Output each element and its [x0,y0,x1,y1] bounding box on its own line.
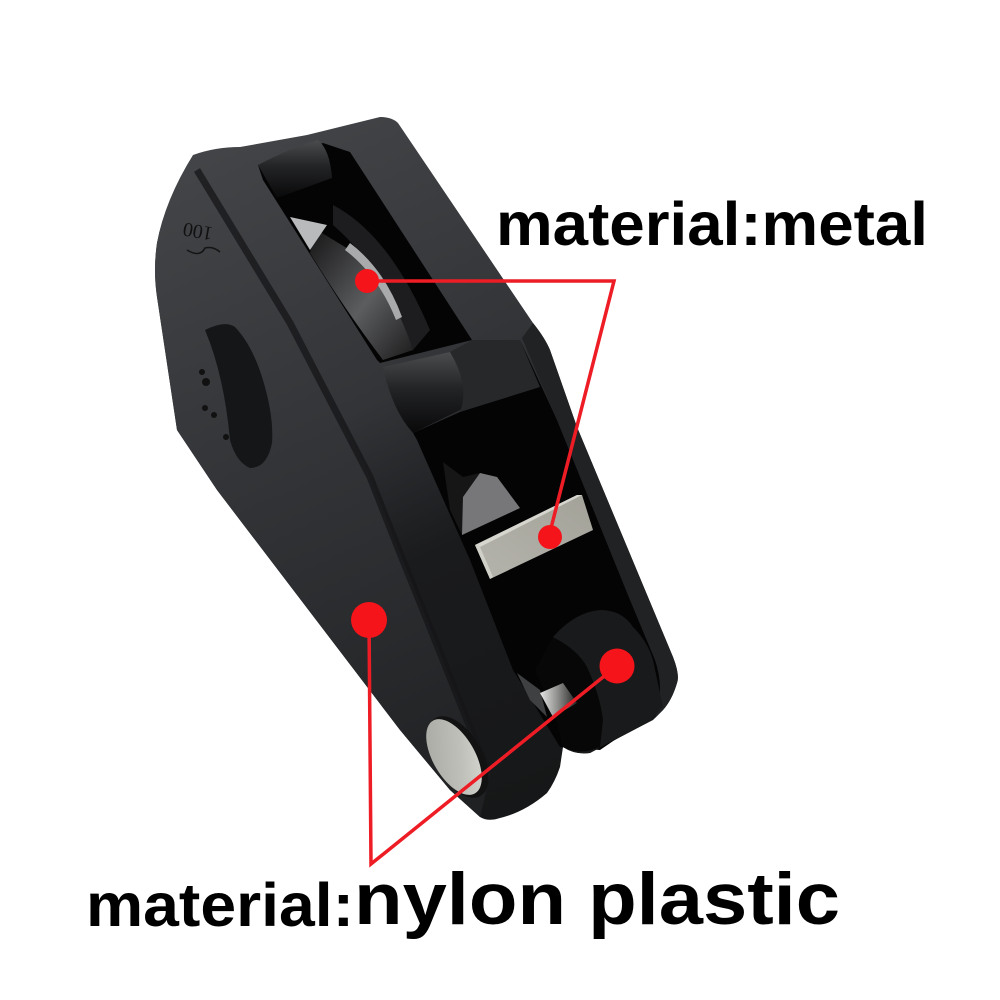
top roller [258,140,332,198]
right rim [522,323,678,718]
product: pulley block [155,117,678,820]
side face [155,160,490,817]
side boss [199,324,272,468]
label: material nylon plastic: material: [86,871,354,939]
middle crossbar [450,340,540,412]
metal pin [475,495,593,579]
rivet head [415,706,501,808]
moulded mark: 100 [181,217,215,244]
pulley silhouette and rim [155,117,678,820]
moulded mark [181,217,220,254]
upper window [258,143,472,363]
label: material nylon plastic: nylon plastic [354,859,840,940]
face and rim boundary shadow [197,170,487,768]
lower metal wheel [443,462,520,535]
bottom roller [535,610,663,753]
callout lines: nylon plastic [369,620,618,864]
lower window [413,340,663,750]
label: material metal: material:metal [496,190,928,258]
callout lines: metal [368,281,614,536]
upper metal wheel [290,205,430,360]
middle roller [383,352,467,433]
axle [517,673,577,717]
marker dots [351,269,634,684]
